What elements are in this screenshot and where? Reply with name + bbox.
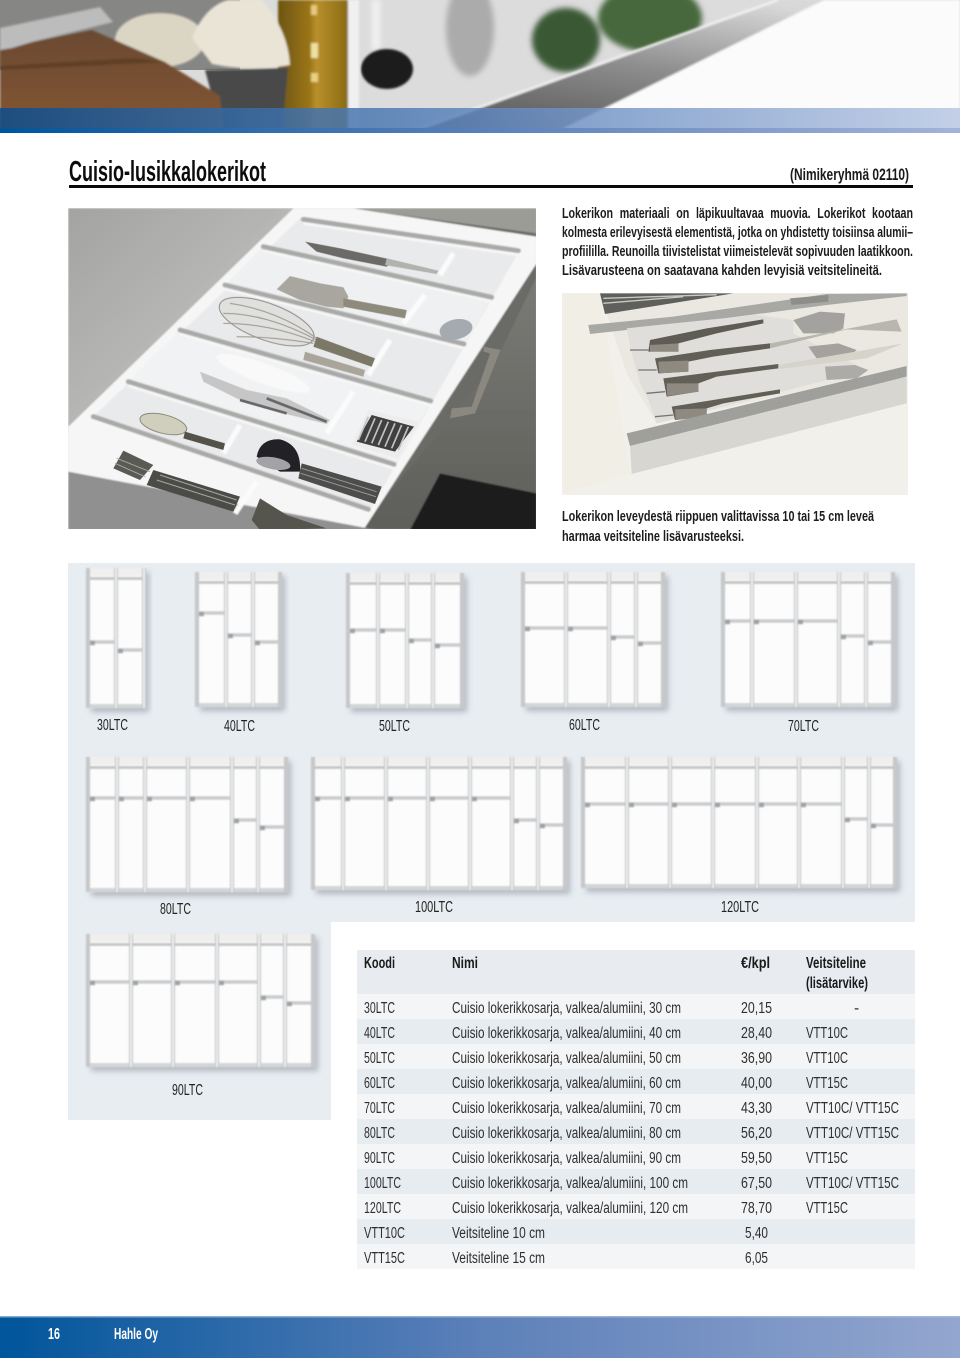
photo: drawer with cutlery tray [68,208,537,530]
row VTT10C: VTT10C [364,1225,405,1242]
table header: (lisätarvike) [806,975,868,992]
row 120LTC: Cuisio lokerikkosarja, valkea/alumiini, 120 cm [452,1200,688,1217]
row 40LTC [357,1019,915,1044]
footer bar [0,1316,960,1358]
row 50LTC: 36,90 [741,1050,772,1067]
row 120LTC: VTT15C [806,1200,848,1217]
label 100LTC: 100LTC [415,899,453,916]
label 50LTC: 50LTC [379,718,410,735]
row 80LTC: 80LTC [364,1125,395,1142]
row 70LTC: 43,30 [741,1100,772,1117]
row 90LTC: Cuisio lokerikkosarja, valkea/alumiini, 90 cm [452,1150,681,1167]
row 30LTC: - [854,1000,859,1017]
label 60LTC: 60LTC [569,717,600,734]
row VTT15C: Veitsiteline 15 cm [452,1250,545,1267]
row 50LTC [357,1044,915,1069]
tray 40LTC [197,572,285,711]
photo: knife rack [562,293,908,495]
row VTT10C [357,1219,915,1244]
row 40LTC: VTT10C [806,1025,848,1042]
row 40LTC: 28,40 [741,1025,772,1042]
tray 70LTC [723,572,898,711]
row 50LTC: VTT10C [806,1050,848,1067]
tray 30LTC [88,568,149,712]
row 30LTC: Cuisio lokerikkosarja, valkea/alumiini, 30 cm [452,1000,681,1017]
table header: Veitsiteline [806,955,866,972]
label 80LTC: 80LTC [160,901,191,918]
row VTT15C: VTT15C [364,1250,405,1267]
row 60LTC: Cuisio lokerikkosarja, valkea/alumiini, 60 cm [452,1075,681,1092]
label 70LTC: 70LTC [788,718,819,735]
row 120LTC: 78,70 [741,1200,772,1217]
tray 60LTC [523,572,668,711]
row 100LTC: 67,50 [741,1175,772,1192]
row 70LTC: VTT10C/ VTT15C [806,1100,899,1117]
label 30LTC: 30LTC [97,717,128,734]
table header: €/kpl [741,955,770,972]
drawer utensils [113,242,501,530]
row VTT15C [357,1244,915,1269]
row 90LTC [357,1144,915,1169]
row VTT15C: 6,05 [745,1250,768,1267]
label 40LTC: 40LTC [224,718,255,735]
panel: product tray models [68,563,915,1120]
row VTT10C: Veitsiteline 10 cm [452,1225,545,1242]
row 70LTC: 70LTC [364,1100,395,1117]
row 40LTC: Cuisio lokerikkosarja, valkea/alumiini, 40 cm [452,1025,681,1042]
product group number: (Nimikeryhmä 02110) [790,166,909,184]
header kitchen photo [0,0,960,133]
table header: Koodi [364,955,395,972]
price table [357,950,915,1269]
label 120LTC: 120LTC [721,899,759,916]
company name: Hahle Oy [114,1326,158,1343]
row 100LTC: VTT10C/ VTT15C [806,1175,899,1192]
row 120LTC [357,1194,915,1219]
page number: 16 [48,1326,60,1343]
row 100LTC [357,1169,915,1194]
knife rack caption: harmaa veitsiteline lisävarusteeksi. [562,529,744,545]
tray 90LTC [88,934,318,1071]
knife rack caption [562,509,875,545]
tray 50LTC [348,573,467,712]
row 60LTC: 60LTC [364,1075,395,1092]
tray 120LTC [583,757,900,892]
row 30LTC: 30LTC [364,1000,395,1017]
row 50LTC: Cuisio lokerikkosarja, valkea/alumiini, 50 cm [452,1050,681,1067]
table header [357,950,915,994]
row 50LTC: 50LTC [364,1050,395,1067]
row 90LTC: VTT15C [806,1150,848,1167]
row 60LTC: VTT15C [806,1075,848,1092]
label 90LTC: 90LTC [172,1082,203,1099]
row 80LTC [357,1119,915,1144]
intro paragraph [562,206,913,279]
tray 80LTC [88,757,291,896]
row 120LTC: 120LTC [364,1200,401,1217]
row 70LTC: Cuisio lokerikkosarja, valkea/alumiini, 70 cm [452,1100,681,1117]
tray 100LTC [313,757,570,894]
title: Cuisio-lusikkalokerikot [69,156,266,188]
row 100LTC: Cuisio lokerikkosarja, valkea/alumiini, 100 cm [452,1175,688,1192]
row 30LTC: 20,15 [741,1000,772,1017]
title rule [69,185,913,188]
table header: Nimi [452,955,478,972]
row 30LTC [357,994,915,1019]
row VTT10C: 5,40 [745,1225,768,1242]
row 70LTC [357,1094,915,1119]
row 60LTC: 40,00 [741,1075,772,1092]
row 90LTC: 90LTC [364,1150,395,1167]
row 40LTC: 40LTC [364,1025,395,1042]
row 90LTC: 59,50 [741,1150,772,1167]
row 80LTC: Cuisio lokerikkosarja, valkea/alumiini, 80 cm [452,1125,681,1142]
row 100LTC: 100LTC [364,1175,401,1192]
row 60LTC [357,1069,915,1094]
row 80LTC: VTT10C/ VTT15C [806,1125,899,1142]
row 80LTC: 56,20 [741,1125,772,1142]
